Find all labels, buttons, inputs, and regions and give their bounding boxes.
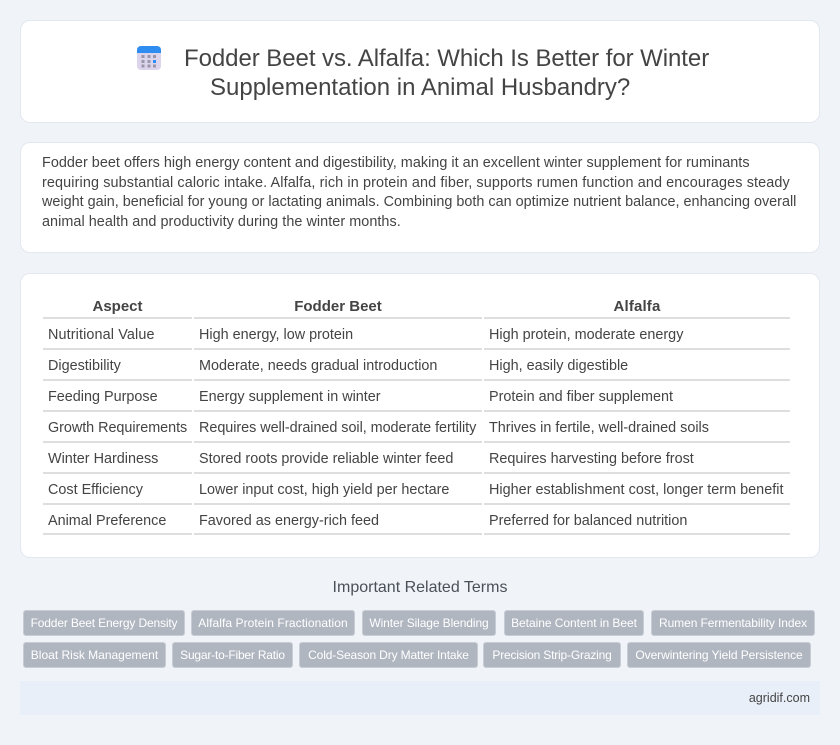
row: Animal Preference: Preferred for balanced nutrition — [489, 513, 687, 529]
intro text — [42, 155, 796, 230]
tag — [191, 610, 355, 636]
row: Feeding Purpose: Feeding Purpose — [48, 389, 158, 405]
tag: Overwintering Yield Persistence — [635, 648, 803, 662]
comparison table — [43, 298, 790, 535]
row: Digestibility: Digestibility — [48, 358, 121, 374]
row: Digestibility: Moderate, needs gradual introduction — [199, 358, 437, 374]
header: Aspect: Aspect — [92, 298, 143, 315]
tag — [651, 610, 815, 636]
panel: intro text card — [20, 142, 820, 253]
tag — [362, 610, 496, 636]
row: Cost Efficiency: Higher establishment cost, longer term benefit — [489, 482, 783, 498]
heading: Important Related Terms: Important Related Terms — [333, 579, 507, 596]
tag: Sugar-to-Fiber Ratio — [180, 648, 285, 662]
icon: calendar — [137, 46, 161, 70]
tag: Bloat Risk Management — [31, 648, 158, 662]
tag: Rumen Fermentability Index — [659, 616, 807, 630]
header: Fodder Beet: Fodder Beet — [294, 298, 382, 315]
row: Animal Preference: Favored as energy-rich feed — [199, 513, 379, 529]
tag: Fodder Beet Energy Density — [31, 616, 177, 630]
intro text: Fodder beet offers high energy content and digestibility, making it an excellent winter supplement for ruminants — [42, 155, 750, 171]
footer source: agridif.com — [749, 691, 810, 705]
row: Cost Efficiency: Cost Efficiency — [48, 482, 143, 498]
row: Feeding Purpose: Energy supplement in winter — [199, 389, 381, 405]
tag: Betaine Content in Beet — [511, 616, 637, 630]
title — [184, 45, 709, 101]
tag — [483, 642, 621, 668]
tag — [23, 642, 166, 668]
row: Digestibility: High, easily digestible — [489, 358, 628, 374]
tag — [504, 610, 644, 636]
tag: Alfalfa Protein Fractionation — [198, 616, 348, 630]
row: Feeding Purpose — [48, 389, 673, 405]
row: Nutritional Value — [48, 327, 684, 343]
row: Digestibility — [48, 358, 628, 374]
row: Winter Hardiness: Stored roots provide reliable winter feed — [199, 451, 453, 467]
row: Winter Hardiness — [48, 451, 694, 467]
tag: Winter Silage Blending — [369, 616, 489, 630]
header: Alfalfa: Alfalfa — [614, 298, 660, 315]
tag — [172, 642, 293, 668]
tag — [23, 610, 185, 636]
footer bar — [20, 681, 820, 715]
title: Fodder Beet vs. Alfalfa: Which Is Better for Winter — [184, 45, 709, 72]
tag: Precision Strip-Grazing — [492, 648, 612, 662]
row: Growth Requirements: Growth Requirements — [48, 420, 187, 436]
panel: title card — [20, 20, 820, 123]
term tags — [23, 610, 815, 668]
intro text: requiring substantial caloric intake. Alfalfa, rich in protein and fiber, supports rumen function and encourages steady — [42, 175, 790, 191]
panel: comparison table card — [20, 273, 820, 558]
tag: Cold-Season Dry Matter Intake — [308, 648, 469, 662]
row: Nutritional Value: High protein, moderate energy — [489, 327, 683, 343]
row: Nutritional Value: Nutritional Value — [48, 327, 155, 343]
tag — [299, 642, 478, 668]
row: Animal Preference — [48, 513, 687, 529]
title: Supplementation in Animal Husbandry? — [210, 74, 630, 101]
intro text: weight gain, beneficial for young or lactating animals. Combining both can optimize nutrient balance, enhancing overall — [42, 194, 796, 210]
row: Feeding Purpose: Protein and fiber supplement — [489, 389, 673, 405]
row: Animal Preference: Animal Preference — [48, 513, 166, 529]
row: Growth Requirements — [48, 420, 709, 436]
row: Growth Requirements: Requires well-drained soil, moderate fertility — [199, 420, 476, 436]
row: Winter Hardiness: Requires harvesting before frost — [489, 451, 694, 467]
row: Cost Efficiency: Lower input cost, high yield per hectare — [199, 482, 449, 498]
intro text: animal health and productivity during the winter months. — [42, 214, 401, 230]
tag — [627, 642, 811, 668]
row: Nutritional Value: High energy, low protein — [199, 327, 353, 343]
row: Growth Requirements: Thrives in fertile, well-drained soils — [489, 420, 709, 436]
row: Winter Hardiness: Winter Hardiness — [48, 451, 158, 467]
row: Cost Efficiency — [48, 482, 784, 498]
